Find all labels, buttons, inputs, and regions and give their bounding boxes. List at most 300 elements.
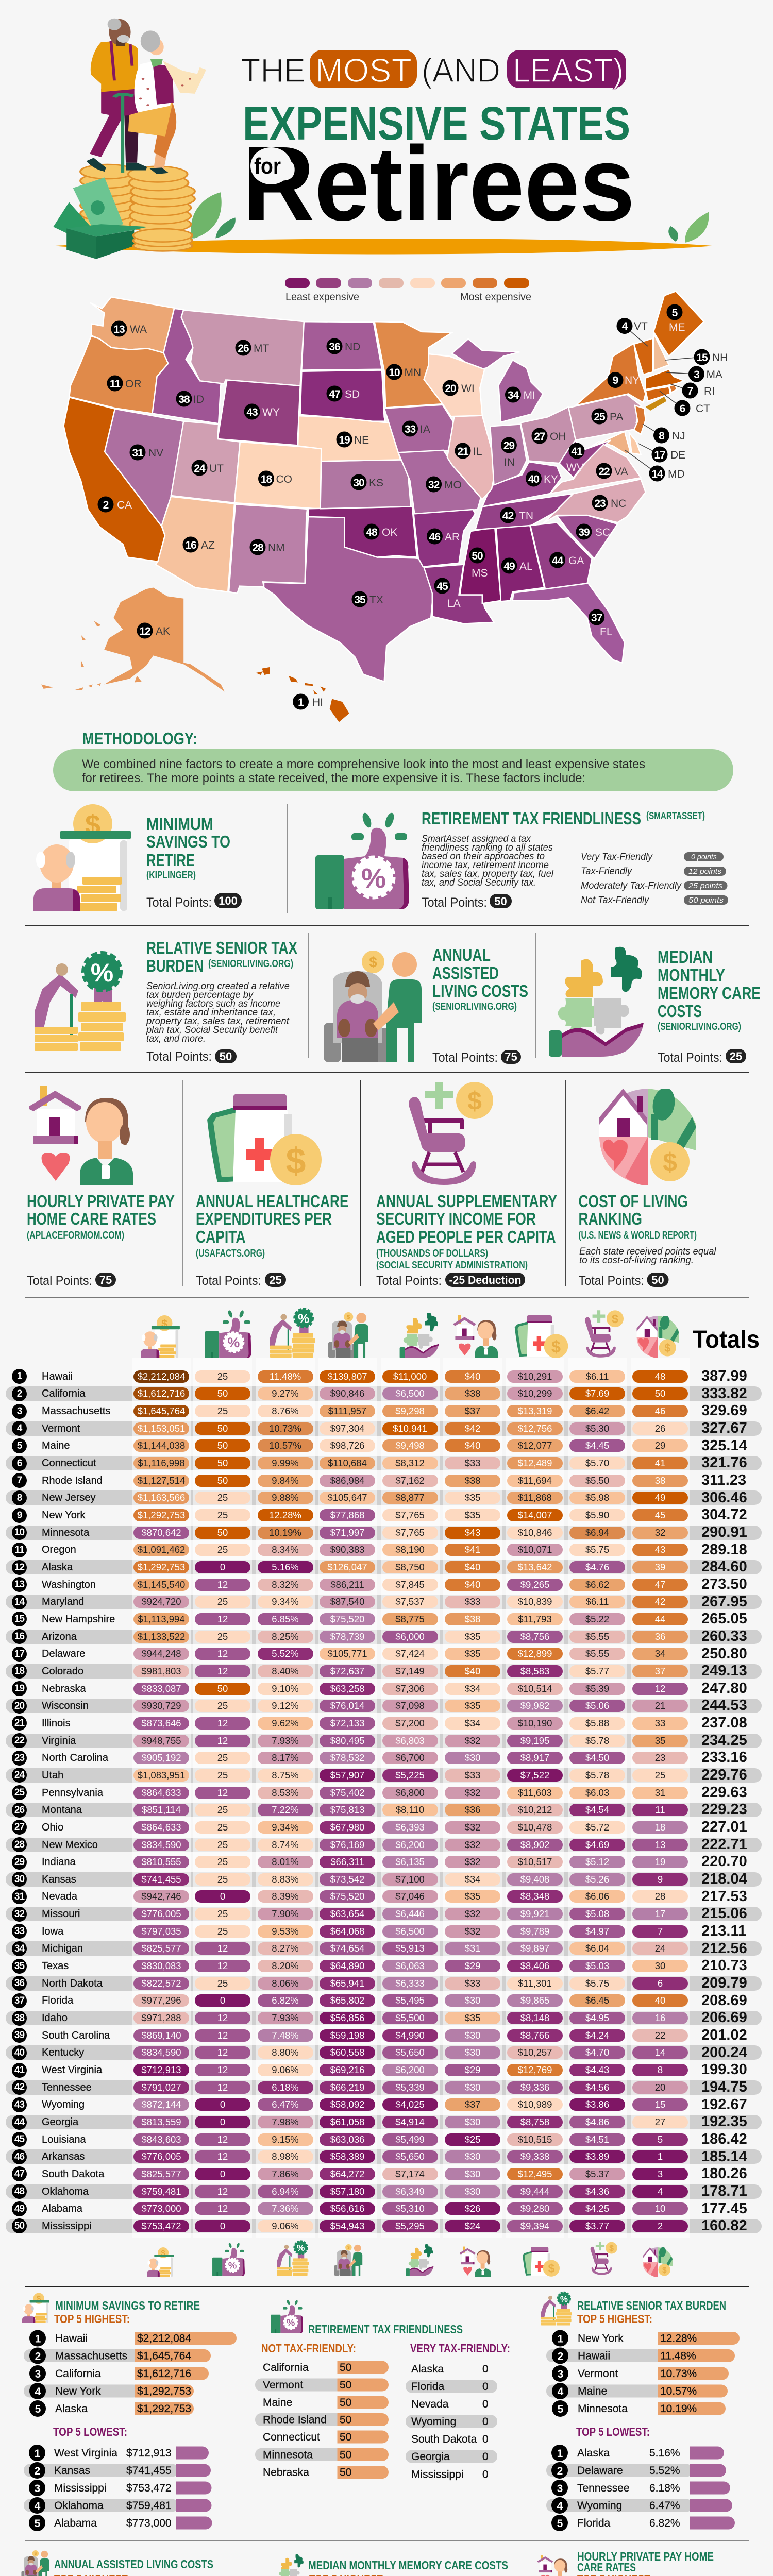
row: Utah: 8.75% [272, 1770, 299, 1781]
row: Nevada: $8,348 [520, 1891, 549, 1902]
row: Texas: $64,890 [330, 1960, 364, 1971]
row: Maine: 325.14 [701, 1437, 747, 1454]
list panel: relative senior tax burden: 5.52% [649, 2465, 680, 2477]
row: Wyoming: $872,144 [141, 2099, 181, 2110]
row: New Hampshire: $75,520 [330, 1614, 364, 1624]
row: Louisiana: 9.15% [272, 2134, 299, 2145]
row: California: 333.82 [701, 1385, 747, 1402]
map labels: rank badges and state codes: ND [345, 341, 360, 353]
row: South Dakota: $7,174 [395, 2168, 425, 2179]
row: Oregon: $8,190 [395, 1544, 425, 1555]
row: Texas [12, 1957, 747, 1974]
map labels: rank badges and state codes: WI [461, 383, 475, 395]
table header icons [141, 1309, 679, 1358]
row: Washington: $9,265 [520, 1579, 549, 1590]
row: Delaware: 34 [655, 1648, 665, 1659]
row: Tennessee [0, 2079, 773, 2096]
row: Missouri: 7.90% [272, 1908, 299, 1919]
list panel: retirement tax friendliness: 50 [340, 2362, 351, 2374]
row: Colorado: $40 [465, 1666, 480, 1676]
list panel: minimum savings to retire: Hawaii [55, 2333, 88, 2344]
list panel: retirement tax friendliness: Maine [263, 2397, 292, 2409]
row: North Carolina [12, 1749, 747, 1766]
list panel: minimum savings to retire: $1,292,753 [137, 2403, 191, 2415]
row: Washington: 47 [655, 1579, 665, 1590]
row: Montana: $8,110 [396, 1804, 424, 1815]
row: Illinois: $5.88 [585, 1718, 609, 1728]
row: South Dakota: $30 [465, 2168, 480, 2179]
map labels: rank badges and state codes: NM [268, 542, 285, 554]
row: Kansas: $73,542 [330, 1874, 364, 1885]
row: Utah: 25 [217, 1770, 228, 1781]
map labels: rank badges and state codes: VT [634, 320, 648, 332]
row: Oklahoma: $30 [465, 2186, 480, 2197]
row: Minnesota: $71,997 [330, 1527, 364, 1538]
list panel: minimum savings to retire: $1,612,716 [137, 2368, 191, 2380]
row: Arkansas: $5,650 [395, 2151, 425, 2162]
row: Delaware: 250.80 [701, 1646, 747, 1662]
list panel: minimum savings to retire: $753,472 [126, 2482, 172, 2494]
row: Texas: 35 [14, 1961, 24, 1972]
row: South Carolina: 12 [217, 2030, 228, 2041]
row: Georgia: 27 [655, 2116, 665, 2127]
row: Vermont: Vermont [42, 1423, 80, 1434]
row: Arizona: $1,133,522 [138, 1631, 185, 1642]
row: Rhode Island: $1,127,514 [138, 1475, 185, 1486]
row: Arkansas [0, 2148, 773, 2165]
row: Arizona: 36 [655, 1631, 665, 1642]
row: Washington: 273.50 [701, 1576, 747, 1592]
map labels: rank badges and state codes: ME [669, 321, 685, 333]
row: West Virginia: $4.43 [585, 2064, 609, 2075]
list panel: relative senior tax burden: 10.19% [660, 2403, 697, 2415]
row: Arkansas: 185.14 [701, 2148, 747, 2165]
row: Missouri: $6,446 [395, 1908, 425, 1919]
list panel: retirement tax friendliness: Connecticut [263, 2431, 320, 2443]
map labels: rank badges and state codes: 19 [339, 434, 350, 446]
list panel: minimum savings to retire: 2 [35, 2350, 41, 2363]
row: Wyoming: $58,092 [330, 2099, 364, 2110]
row: Mississippi: $3.77 [585, 2221, 609, 2231]
panel: retirement tax friendliness: based on their approaches to [422, 851, 545, 862]
list panel: minimum savings to retire: $2,212,084 [137, 2333, 191, 2344]
row: New Mexico: $8,902 [520, 1839, 549, 1850]
title [241, 50, 635, 243]
row: North Dakota: 8.06% [272, 1978, 299, 1989]
panel: hourly private pay home care rates: Total Points: [27, 1274, 92, 1288]
row: California: $7.69 [585, 1388, 609, 1399]
row: Wisconsin: 9.12% [272, 1700, 299, 1711]
row: Rhode Island: 311.23 [701, 1472, 746, 1488]
map labels: rank badges and state codes: CA [117, 499, 132, 511]
row: Texas: $8,406 [520, 1960, 549, 1971]
panel: cost of living ranking: 50 [651, 1274, 664, 1286]
row: Hawaii: $11,000 [393, 1371, 427, 1382]
row: Utah: $1,083,951 [138, 1770, 185, 1781]
list panel: retirement tax friendliness: 50 [340, 2379, 351, 2391]
map labels: rank badges and state codes: CT [696, 403, 710, 415]
row: Maryland: Maryland [42, 1596, 84, 1607]
row: Nebraska: 247.80 [701, 1680, 747, 1697]
list panel: retirement tax friendliness: Minnesota [263, 2449, 313, 2461]
panel: annual assisted living costs [324, 945, 528, 1065]
row: Wyoming: $4,025 [395, 2099, 425, 2110]
row: Nevada: 217.53 [701, 1888, 747, 1905]
row: California: $1,612,716 [138, 1388, 185, 1399]
panel: annual supplementary security income: ANNUAL SUPPLEMENTARY [376, 1192, 557, 1211]
map labels: rank badges and state codes: 4 [622, 320, 628, 332]
row: Maryland: 42 [655, 1596, 665, 1607]
row: Maryland: $10,839 [518, 1596, 552, 1607]
row: Kentucky: 14 [655, 2047, 665, 2058]
panel: median monthly memory care costs: 25 [730, 1050, 742, 1063]
list panel: relative senior tax burden: 6.18% [649, 2482, 680, 2494]
row: South Carolina: 39 [14, 2030, 24, 2041]
row: Delaware: Delaware [42, 1648, 85, 1659]
row: Ohio: $10,478 [518, 1822, 552, 1833]
row: Delaware [12, 1646, 747, 1662]
map labels: rank badges and state codes: 29 [503, 440, 514, 452]
row: North Carolina: North Carolina [42, 1752, 108, 1764]
row: Maryland: $924,720 [141, 1596, 181, 1607]
row: Colorado: 249.13 [701, 1663, 747, 1679]
list panel: relative senior tax burden: 5 [558, 2403, 564, 2415]
row: Washington: 13 [14, 1579, 24, 1590]
row: Rhode Island: 38 [655, 1475, 665, 1486]
list panel: retirement tax friendliness: 0 [482, 2363, 489, 2375]
list panel: minimum savings to retire: $773,000 [126, 2517, 172, 2529]
map labels: rank badges and state codes: 21 [457, 446, 469, 457]
row: Oregon: $1,091,462 [138, 1544, 185, 1555]
row: New Jersey: $11,868 [518, 1492, 552, 1503]
map labels: rank badges and state codes: TN [519, 510, 533, 522]
map labels: rank badges and state codes: 15 [696, 352, 708, 364]
map labels: rank badges and state codes: IL [473, 446, 482, 457]
title: for [254, 154, 281, 179]
row: Arkansas: $3.89 [585, 2151, 609, 2162]
row: Washington: 12 [217, 1579, 228, 1590]
row: Montana [0, 1801, 773, 1819]
row: Colorado: 37 [655, 1666, 665, 1676]
row: Tennessee: 20 [655, 2082, 665, 2093]
row: Wisconsin: 244.53 [701, 1697, 747, 1714]
row: Kansas: Kansas [42, 1874, 76, 1885]
row: Nevada: $75,520 [330, 1891, 364, 1902]
row: Massachusetts: Massachusetts [42, 1405, 110, 1417]
row: California: 50 [217, 1388, 228, 1399]
list panel: hourly private pay home care rates: HOURLY PRIVATE PAY HOME [577, 2550, 714, 2563]
row: Kentucky [0, 2044, 773, 2061]
row: Ohio: $6,393 [395, 1822, 425, 1833]
map labels: rank badges and state codes: 14 [651, 468, 663, 480]
row: Kansas [0, 1871, 773, 1888]
list panel: minimum savings to retire: 2 [35, 2465, 40, 2477]
row: Minnesota: 10 [14, 1527, 24, 1538]
row: Arizona: 8.25% [272, 1631, 299, 1642]
title: THE [241, 52, 306, 89]
row: New Jersey: New Jersey [42, 1492, 95, 1503]
list panel: relative senior tax burden: Hawaii [578, 2350, 610, 2362]
row: Wyoming: $3.86 [585, 2099, 609, 2110]
row: Connecticut: $110,684 [328, 1458, 367, 1468]
panel: relative senior tax burden: weighing factors such as income [146, 998, 280, 1009]
panel: retirement tax friendliness: (SMARTASSET) [646, 810, 705, 822]
panel: hourly private pay home care rates: (APLACEFORMOM.COM) [27, 1230, 124, 1241]
row: Michigan: 8.27% [272, 1943, 299, 1954]
row: Virginia: 7.93% [272, 1735, 299, 1746]
row: New Jersey: 25 [217, 1492, 228, 1503]
row: Pennsylvania: 229.63 [701, 1784, 747, 1801]
row: Connecticut [0, 1454, 773, 1472]
map labels: rank badges and state codes: MO [444, 479, 462, 491]
panel: annual supplementary security income: (THOUSANDS OF DOLLARS) [376, 1248, 488, 1259]
row: Colorado: $8,583 [520, 1666, 549, 1676]
row: South Dakota [12, 2165, 747, 2182]
row: Iowa: $32 [465, 1926, 480, 1937]
methodology callout: We combined nine factors to create a more comprehensive look into the most and least expensive states [82, 757, 645, 771]
list panel: retirement tax friendliness: 50 [340, 2414, 351, 2426]
row: Indiana: $810,555 [141, 1856, 181, 1867]
list panel: relative senior tax burden: Delaware [577, 2465, 623, 2477]
map labels: rank badges and state codes: 20 [445, 383, 456, 395]
row: Pennsylvania: 8.53% [272, 1787, 299, 1798]
map labels: rank badges and state codes: HI [312, 697, 323, 708]
panel: minimum savings to retire: 100 [219, 894, 238, 907]
row: Oklahoma: 178.71 [701, 2183, 747, 2199]
row: Pennsylvania: $11,603 [518, 1787, 552, 1798]
map labels: rank badges and state codes: KY [544, 473, 558, 485]
row: Wisconsin: $35 [465, 1700, 480, 1711]
row: Kentucky: $4.70 [585, 2047, 609, 2058]
row: Georgia: 7.98% [272, 2116, 299, 2127]
row: Ohio: $864,633 [141, 1822, 181, 1833]
list panel: retirement tax friendliness: 50 [340, 2467, 351, 2479]
row: Kentucky: Kentucky [42, 2047, 84, 2058]
title: (AND [422, 52, 500, 89]
row: Vermont: 50 [217, 1423, 228, 1434]
row: Nevada [12, 1888, 747, 1905]
panel: cost of living ranking [578, 1086, 716, 1288]
row: Arizona: $78,739 [330, 1631, 364, 1642]
row: Ohio: 18 [655, 1822, 665, 1833]
row: Georgia: 192.35 [701, 2113, 747, 2130]
row: Hawaii: $139,807 [327, 1371, 367, 1382]
map legend [285, 278, 531, 303]
title: EXPENSIVE STATES [243, 97, 630, 150]
row: South Carolina: $59,198 [330, 2030, 364, 2041]
map labels: rank badges and state codes: 17 [654, 449, 665, 461]
row: Pennsylvania: 31 [655, 1787, 665, 1798]
row: Tennessee: $4.56 [585, 2082, 609, 2093]
map labels: rank badges and state codes: 40 [528, 473, 539, 485]
list panel: minimum savings to retire: 1 [35, 2333, 41, 2345]
row: Georgia [0, 2113, 773, 2131]
list panel: hourly private pay home care rates [537, 2550, 756, 2576]
row: Nevada: Nevada [42, 1891, 77, 1902]
row: North Carolina: 23 [14, 1753, 24, 1764]
list panel: retirement tax friendliness: RETIREMENT TAX FRIENDLINESS [308, 2323, 463, 2336]
map labels: rank badges and state codes: CO [276, 473, 292, 485]
panel: retirement tax friendliness: RETIREMENT TAX FRIENDLINESS [422, 809, 641, 828]
row: Colorado: 18 [14, 1666, 24, 1676]
panel: annual assisted living costs: LIVING COSTS [432, 981, 528, 1001]
row: Kentucky: $834,590 [141, 2047, 181, 2058]
row: Louisiana: $4.51 [585, 2134, 609, 2145]
row: Idaho: $56,856 [330, 2012, 364, 2023]
row: New Jersey: $105,647 [327, 1492, 367, 1503]
row: Alabama: 12 [217, 2203, 228, 2214]
panel: annual healthcare expenditures per capita [196, 1094, 348, 1288]
row: Louisiana: $10,515 [518, 2134, 552, 2145]
map labels: rank badges and state codes: ID [193, 394, 204, 405]
row: Louisiana: $63,036 [330, 2134, 364, 2145]
panel: annual supplementary security income: Total Points: [376, 1274, 442, 1288]
row: New Hampshire: 44 [655, 1614, 665, 1624]
row: Mississippi: 160.82 [701, 2217, 747, 2234]
panel: retirement tax friendliness: Total Points: [422, 895, 487, 910]
panel: hourly private pay home care rates [27, 1086, 175, 1288]
row: Maryland: $7,537 [395, 1596, 425, 1607]
row: Alabama: $56,616 [330, 2203, 364, 2214]
row: Connecticut: $8,312 [395, 1458, 425, 1468]
panel: annual healthcare expenditures per capita: EXPENDITURES PER [196, 1209, 332, 1228]
row: Delaware: 5.52% [272, 1648, 299, 1659]
row: Michigan: $9,897 [520, 1943, 549, 1954]
row: Hawaii: $6.11 [586, 1371, 609, 1382]
row: Ohio: $67,980 [330, 1822, 364, 1833]
methodology callout [53, 749, 733, 791]
row: Georgia: 0 [220, 2116, 225, 2127]
row: New Hampshire: $11,793 [518, 1614, 552, 1624]
row: Hawaii: 25 [217, 1371, 228, 1382]
map labels: rank badges and state codes: KS [369, 477, 383, 489]
row: Alaska [0, 1558, 773, 1576]
list panel: retirement tax friendliness: 50 [340, 2397, 351, 2409]
panel: annual supplementary security income: (SOCIAL SECURITY ADMINISTRATION) [376, 1260, 528, 1271]
row: Ohio [12, 1819, 747, 1835]
list panel: minimum savings to retire: TOP 5 LOWEST: [53, 2425, 127, 2438]
row: Montana: 7.22% [272, 1804, 299, 1815]
row: Texas: $6,063 [395, 1960, 425, 1971]
map labels: rank badges and state codes: 10 [389, 367, 400, 379]
list panel: retirement tax friendliness: NOT TAX-FRIENDLY: [261, 2342, 356, 2355]
panel: median monthly memory care costs: MONTHLY [658, 965, 725, 985]
row: Wyoming: 192.67 [701, 2096, 747, 2113]
row: Kansas: 30 [14, 1874, 24, 1885]
row: Michigan: $825,577 [141, 1943, 181, 1954]
list panel: relative senior tax burden: TOP 5 LOWEST: [576, 2425, 650, 2438]
row: California: 2 [17, 1388, 22, 1399]
panel: median monthly memory care costs: COSTS [658, 1002, 702, 1021]
row: Tennessee: Tennessee [42, 2082, 92, 2093]
list panel: annual assisted living costs: ANNUAL ASSISTED LIVING COSTS [54, 2557, 213, 2571]
row: New Mexico: $76,169 [330, 1839, 364, 1850]
row: Maine: $98,726 [330, 1440, 364, 1451]
map labels: rank badges and state codes: OR [125, 378, 141, 390]
row: Wisconsin: $76,014 [330, 1700, 364, 1711]
row: Alabama: $5,310 [395, 2203, 425, 2214]
row: California: 50 [655, 1388, 665, 1399]
row: West Virginia: $6,200 [395, 2064, 425, 2075]
row: Oklahoma: $57,180 [330, 2186, 364, 2197]
map labels: rank badges and state codes: 38 [178, 394, 190, 405]
row: Illinois: Illinois [42, 1718, 71, 1729]
list panel: relative senior tax burden: Tennessee [577, 2482, 630, 2494]
row: Alaska: $8,750 [395, 1562, 425, 1572]
row: Minnesota: 290.91 [701, 1524, 747, 1540]
panel: annual healthcare expenditures per capita: CAPITA [196, 1227, 245, 1246]
row: New York: 304.72 [701, 1506, 747, 1523]
panel: relative senior tax burden: tax, and more. [146, 1033, 206, 1044]
row: Alabama: $4.25 [585, 2203, 609, 2214]
row: Hawaii: Hawaii [42, 1371, 73, 1382]
row: Arkansas: Arkansas [42, 2151, 85, 2162]
row: Wyoming: $37 [465, 2099, 480, 2110]
row: New Mexico: 28 [14, 1839, 24, 1850]
row: Vermont: $42 [465, 1423, 480, 1434]
row: Minnesota: Minnesota [42, 1527, 89, 1538]
row: Washington: 8.32% [272, 1579, 299, 1590]
map labels: rank badges and state codes: NE [354, 434, 369, 446]
map labels: rank badges and state codes: NV [148, 447, 163, 459]
row: Texas: $5.03 [585, 1960, 609, 1971]
row: Iowa: Iowa [42, 1926, 63, 1937]
row: Pennsylvania: $6.03 [585, 1787, 609, 1798]
row: West Virginia: $69,216 [330, 2064, 364, 2075]
row: Alaska: Alaska [42, 1562, 73, 1573]
row: Rhode Island: $86,984 [330, 1475, 364, 1486]
row: Tennessee: 42 [14, 2082, 24, 2093]
table footer icons [147, 2241, 673, 2277]
row: Idaho: 16 [655, 2012, 665, 2023]
row: New York: 9 [17, 1510, 22, 1521]
row: Idaho: $971,288 [141, 2012, 181, 2023]
row: South Dakota: South Dakota [42, 2168, 104, 2180]
row: Idaho: $35 [465, 2012, 480, 2023]
row: Wisconsin: $930,729 [141, 1700, 181, 1711]
row: South Carolina: $30 [465, 2030, 480, 2041]
row: Idaho [0, 2009, 773, 2027]
row: Oregon [12, 1541, 747, 1558]
map labels: rank badges and state codes: 46 [429, 531, 440, 543]
map labels: rank badges and state codes: NJ [672, 430, 685, 442]
row: Texas: 8.20% [272, 1960, 299, 1971]
list panel: minimum savings to retire: $741,455 [126, 2465, 172, 2477]
row: Vermont: $10,941 [393, 1423, 427, 1434]
row: New Jersey: $8,877 [395, 1492, 425, 1503]
row: Rhode Island: 9.84% [272, 1475, 299, 1486]
row: Vermont: 26 [655, 1423, 665, 1434]
row: Arizona: $5.55 [585, 1631, 609, 1642]
row: Arkansas: 1 [658, 2151, 663, 2162]
row: Ohio: 9.34% [272, 1822, 299, 1833]
row: Arizona: $6,000 [395, 1631, 425, 1642]
map labels: rank badges and state codes: IA [420, 423, 430, 435]
map legend: Most expensive [460, 291, 531, 303]
row: Idaho: 12 [217, 2012, 228, 2023]
row: Michigan: 24 [655, 1943, 665, 1954]
row: Michigan: Michigan [42, 1943, 83, 1954]
list panel: minimum savings to retire: 4 [35, 2500, 41, 2512]
map labels: rank badges and state codes: 30 [353, 477, 364, 489]
list panel: minimum savings to retire: 4 [35, 2386, 41, 2398]
row: Hawaii: $40 [465, 1371, 480, 1382]
panel: annual healthcare expenditures per capita: (USAFACTS.ORG) [196, 1248, 265, 1259]
row: Missouri: 25 [217, 1908, 228, 1919]
list panel: retirement tax friendliness: Georgia [411, 2451, 450, 2463]
panel: retirement tax friendliness: Moderately Tax-Friendly [581, 880, 682, 891]
panel: relative senior tax burden: Total Points: [146, 1049, 212, 1064]
